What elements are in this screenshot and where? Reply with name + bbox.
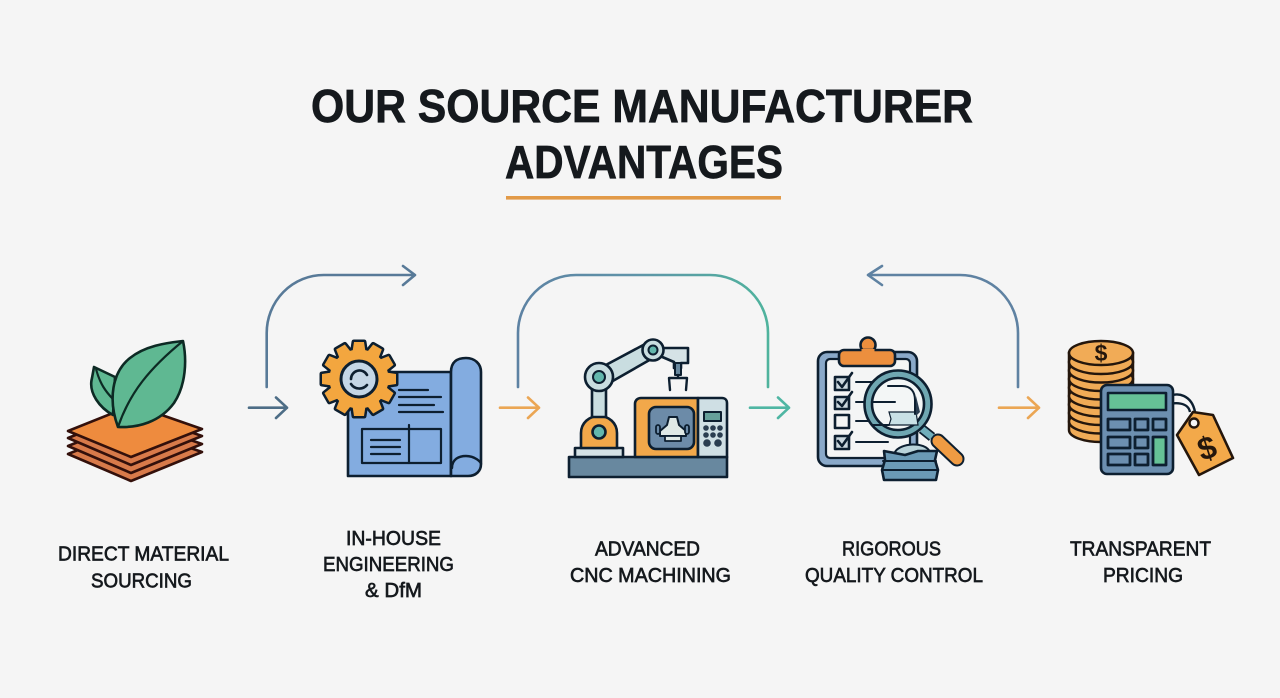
icon: clipboard with magnifier [818,338,957,480]
label: direct material sourcing: SOURCING [91,570,192,592]
label: transparent pricing: TRANSPARENT [1070,538,1211,560]
arrow: curved blue to the right [267,266,415,387]
arrow: curved blue to the left [868,266,1018,387]
label: in-house engineering and DfM: IN-HOUSE [346,528,441,550]
label: in-house engineering and DfM: ENGINEERING [323,554,454,576]
label: in-house engineering and DfM: & DfM [365,580,422,602]
dollar sign on tag: $ [1193,428,1221,468]
icon: CNC machine and robot arm [569,340,727,477]
label: direct material sourcing: DIRECT MATERIAL [58,544,229,566]
label: advanced CNC machining: ADVANCED [595,538,700,560]
icon: leaves on stacked material sheets [68,341,202,481]
arrow: curved blue-to-teal arch [518,275,768,387]
title: ADVANTAGES [505,136,783,188]
title [311,80,973,200]
label: advanced CNC machining [570,538,731,587]
label: rigorous quality control: QUALITY CONTROL [805,565,983,587]
label: transparent pricing: PRICING [1103,565,1183,587]
label: direct material sourcing [58,544,229,592]
icon: blueprint and gear [322,342,481,476]
label: advanced CNC machining: CNC MACHINING [570,565,731,587]
label: transparent pricing [1070,538,1211,587]
arrow: straight orange after quality control [999,398,1039,418]
label: in-house engineering and DfM [323,528,454,602]
arrow: straight teal after machining [750,398,789,418]
label: rigorous quality control: RIGOROUS [842,538,941,560]
dollar sign on coin: $ [1095,340,1108,366]
icon: coins, calculator and price tag [1069,340,1233,475]
arrow: straight orange after engineering [500,398,539,418]
label: rigorous quality control [805,538,983,587]
title: OUR SOURCE MANUFACTURER [311,80,973,132]
arrow: straight blue after sourcing [249,398,287,418]
